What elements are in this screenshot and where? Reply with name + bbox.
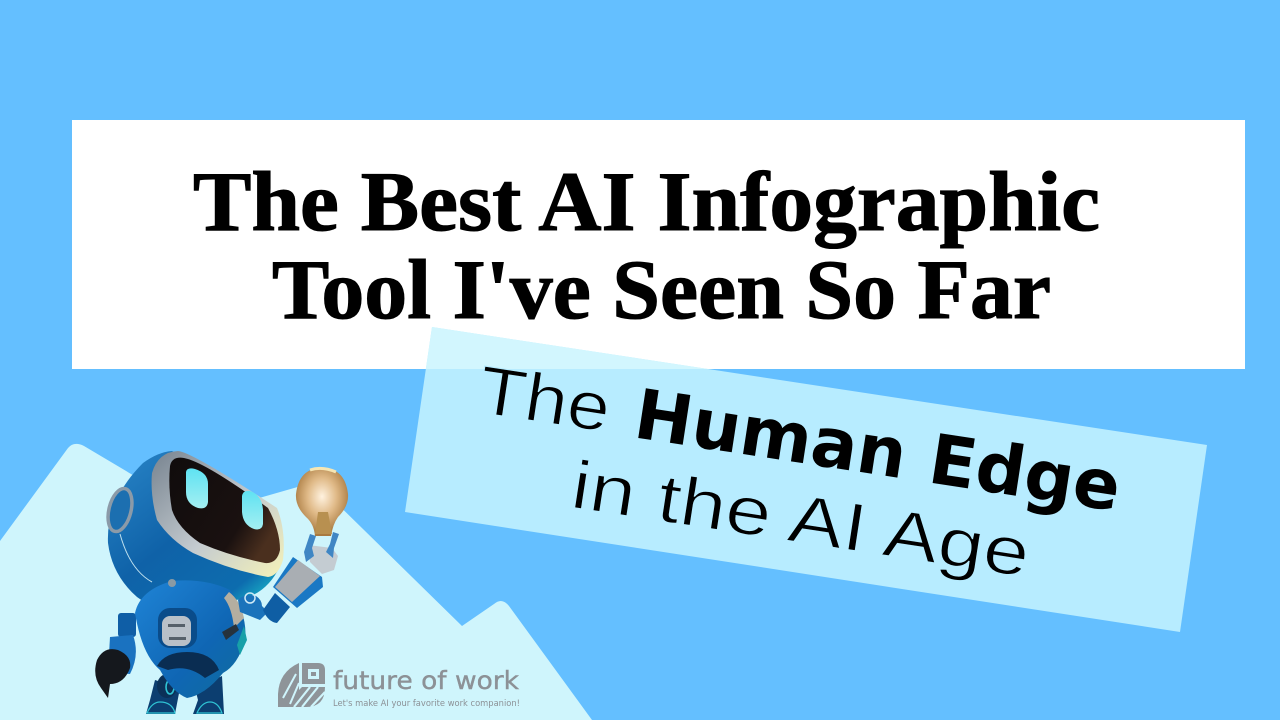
tilted subtitle banner	[405, 327, 1207, 632]
logo wordmark: future of work	[333, 666, 520, 695]
logo tagline: Let's make AI your favorite work companion!	[333, 699, 520, 709]
robot: legs	[146, 670, 224, 714]
subtitle text: Human Edge	[629, 375, 1126, 528]
title text: Tool I've Seen So Far	[272, 243, 1051, 337]
subtitle text	[474, 352, 1126, 592]
logo	[278, 663, 520, 709]
lightbulb	[296, 468, 348, 536]
robot: visor screen	[169, 458, 280, 563]
subtitle text: The	[474, 352, 616, 447]
robot: hand holding bulb	[304, 532, 339, 574]
robot: right eye	[242, 491, 263, 529]
title text: The Best AI Infographic	[193, 155, 1100, 249]
robot: head	[104, 451, 284, 606]
robot: left eye	[186, 468, 208, 508]
logo icon	[278, 663, 325, 707]
mountain shape	[0, 444, 592, 720]
title text	[193, 155, 1100, 337]
robot: visor rim	[152, 451, 284, 577]
title panel	[72, 120, 1245, 369]
robot: right arm	[238, 557, 323, 623]
robot: body	[135, 579, 247, 698]
robot: ear vent	[104, 486, 136, 534]
subtitle text: in the AI Age	[567, 447, 1035, 592]
robot: left arm	[95, 613, 136, 698]
robot illustration	[95, 451, 348, 714]
